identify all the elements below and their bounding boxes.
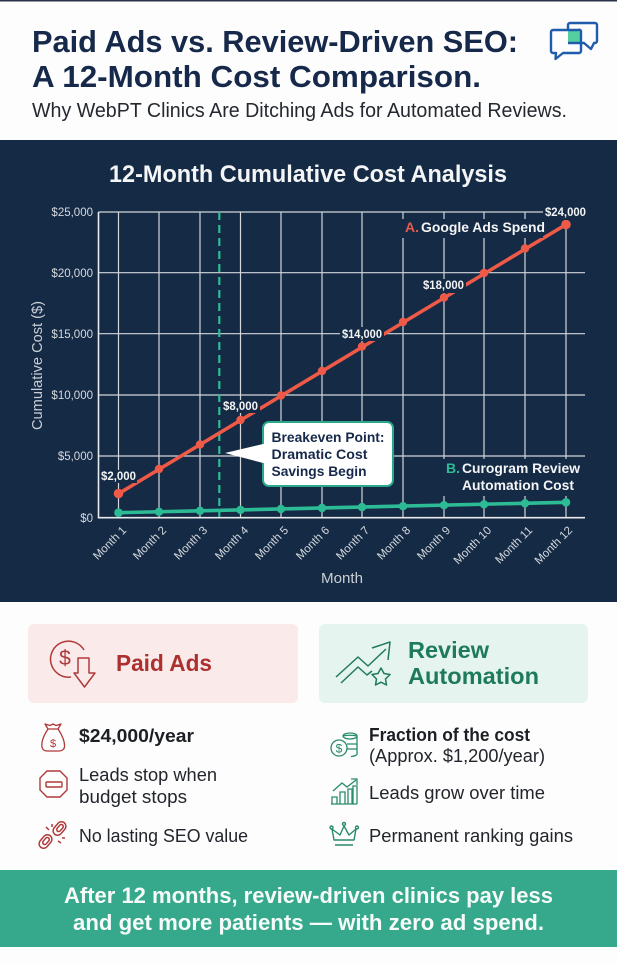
x axis labels: Month 10 [452,525,494,567]
panel: review automation header [319,624,588,703]
item: fraction of the cost: (Approx. $1,200/year) [369,746,545,766]
value labels: $8,000 [223,401,258,413]
x axis labels: Month 9 [415,525,453,563]
icon: chat bubbles [551,23,597,59]
heading: paid ads: Paid Ads [116,650,212,676]
y axis labels [51,207,93,525]
y axis labels: $25,000 [51,207,93,219]
icon: coins: $ [336,742,343,756]
icon: crown [330,822,358,845]
x axis labels: Month 3 [172,525,210,563]
callout: breakeven point: Savings Begin [272,463,366,479]
x axis labels: Month 2 [131,525,169,563]
item: no lasting seo value: No lasting SEO value [79,826,248,846]
x axis labels: Month 5 [253,525,291,563]
title: A 12-Month Cost Comparison. [32,59,481,94]
icon: coins [331,733,357,756]
y axis labels: $15,000 [51,329,93,341]
footer banner: and get more patients — with zero ad spend. [73,910,544,935]
value labels: $18,000 [423,280,464,292]
y axis title: Cumulative Cost ($) [30,301,46,430]
item: permanent ranking gains: Permanent ranking gains [369,826,573,846]
icon: rising arrow with star [336,642,390,685]
x axis labels: Month 8 [375,525,413,563]
item: leads grow: Leads grow over time [369,783,545,803]
legend: google ads spend: A. [405,219,419,235]
icon: broken chain [37,820,68,850]
x axis labels: Month 6 [294,525,332,563]
item: leads stop: Leads stop when [79,765,217,785]
chart title: 12-Month Cumulative Cost Analysis [109,161,507,188]
breakeven dashed line [218,212,220,517]
legend: curogram review automation cost [441,459,584,496]
x axis labels: Month 11 [493,525,535,566]
panel: paid ads header [28,624,298,703]
value labels [100,206,588,483]
y axis labels: $0 [80,513,93,525]
footer banner: After 12 months, review-driven clinics pay less [64,883,553,908]
legend: google ads spend: Google Ads Spend [421,219,545,235]
footer banner [0,870,617,947]
value labels: $24,000 [545,207,586,219]
item: fraction of the cost: Fraction of the cost [369,725,530,745]
review automation series line [114,498,570,517]
icon: growth bars [331,779,357,804]
item: yearly cost: $24,000/year [79,726,194,746]
callout: breakeven point [225,422,393,486]
x axis labels [91,524,575,567]
icon: dollar with down arrow: $ [59,647,71,670]
callout: breakeven point: Breakeven Point: [272,429,384,445]
y axis labels: $10,000 [51,390,93,402]
heading: review automation: Review [408,637,489,663]
y axis labels: $20,000 [51,268,93,280]
y axis labels: $5,000 [58,451,93,463]
google ads series line [114,220,571,498]
panel: review automation list [330,725,573,846]
icon: money bag [42,724,65,751]
icon: stop sign [40,771,67,797]
icon: dollar with down arrow [51,641,95,687]
x axis labels: Month 7 [334,525,372,563]
panel: paid ads list [37,724,248,850]
title: Paid Ads vs. Review-Driven SEO: [32,24,518,59]
x axis labels: Month 1 [91,525,129,563]
callout: breakeven point: Dramatic Cost [272,446,368,462]
item: leads stop: budget stops [79,787,187,807]
subtitle: Why WebPT Clinics Are Ditching Ads for Automated Reviews. [32,100,567,122]
heading: review automation [408,637,539,689]
title [32,24,518,94]
x axis labels: Month 12 [533,525,575,567]
panel: cumulative cost chart [0,140,617,602]
item: leads stop [79,765,217,807]
item: fraction of the cost [369,725,545,766]
legend: curogram review automation cost: Automation Cost [462,477,574,493]
heading: review automation: Automation [408,663,539,689]
legend: curogram review automation cost: Curogram Review [462,460,580,476]
value labels: $14,000 [342,329,382,341]
icon: money bag: $ [50,738,56,750]
value labels: $2,000 [101,471,136,483]
x axis labels: Month 4 [213,524,252,563]
x axis title: Month [321,571,363,587]
legend: curogram review automation cost: B. [446,460,460,476]
